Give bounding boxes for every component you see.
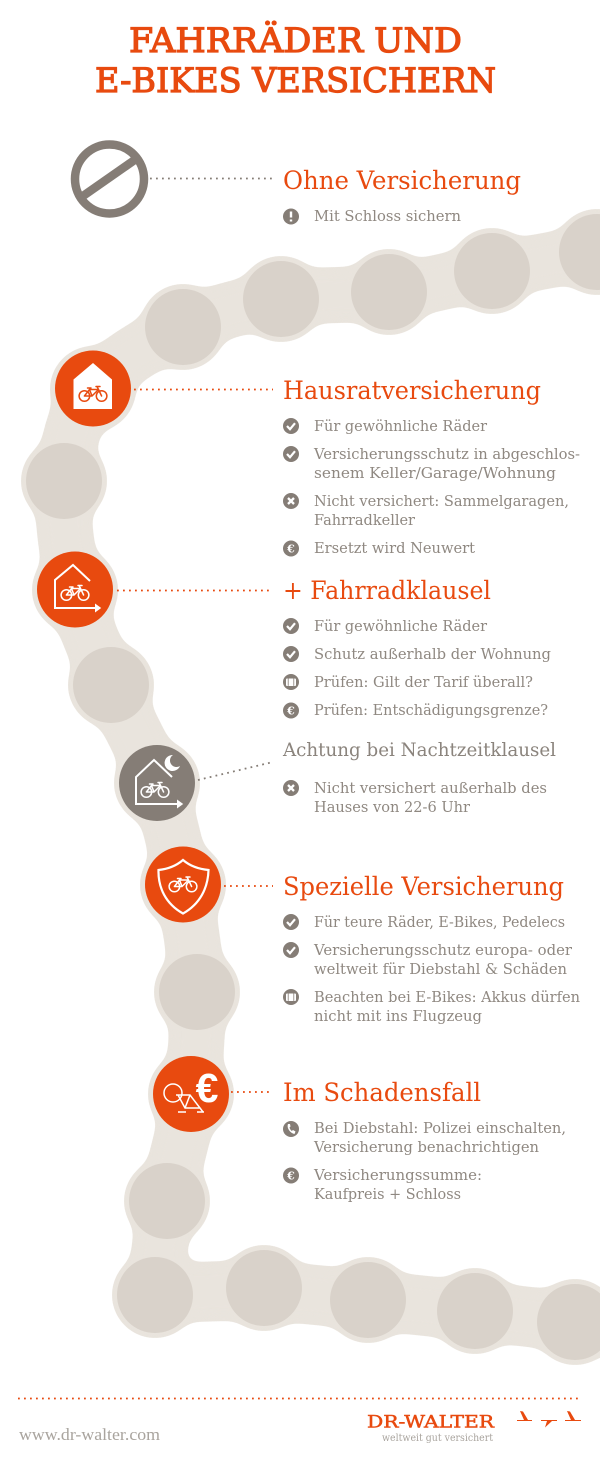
icon: damaged bicycle and euro: € bbox=[196, 1065, 219, 1111]
bullet icon: euro: € bbox=[286, 704, 295, 718]
connector: night clause bbox=[198, 762, 273, 780]
section: im Schadensfall bbox=[283, 1078, 566, 1203]
bullet icon: euro bbox=[283, 540, 299, 556]
bullet icon: euro bbox=[283, 1168, 299, 1184]
section: ohne Versicherung bbox=[283, 166, 521, 225]
bullet text: Kaufpreis + Schloss bbox=[314, 1187, 461, 1203]
bullet text: senem Keller/Garage/Wohnung bbox=[314, 466, 556, 482]
icon: night clause house bbox=[119, 745, 195, 821]
bullet icon: cross bbox=[283, 493, 299, 509]
bullet text bbox=[313, 447, 580, 482]
heading: spezielle Versicherung: Spezielle Versicherung bbox=[283, 872, 564, 901]
bullet text: nicht mit ins Flugzeug bbox=[314, 1009, 482, 1025]
bullet text bbox=[314, 781, 547, 816]
bullet icon: euro: € bbox=[286, 1170, 295, 1182]
bullet text: Versicherungsschutz europa- oder bbox=[313, 943, 572, 959]
logo: DR-WALTER: DR-WALTER bbox=[367, 1412, 495, 1432]
icon: no insurance prohibition sign bbox=[75, 144, 144, 214]
title: E-BIKES VERSICHERN bbox=[95, 61, 496, 101]
bullet icon: exclamation bbox=[283, 208, 299, 224]
bullet icon: cross bbox=[283, 780, 299, 796]
icon: special insurance shield bbox=[145, 846, 221, 922]
section: Fahrradklausel bbox=[283, 576, 551, 719]
bullet icon: euro bbox=[283, 702, 299, 718]
bullet icon: check bbox=[283, 646, 299, 662]
bullet icon: euro: € bbox=[286, 542, 295, 556]
logo: DR-WALTER bbox=[367, 1411, 581, 1444]
bullet icon: suitcase bbox=[283, 989, 299, 1005]
icon: bicycle clause house bbox=[37, 552, 113, 628]
bullet text: Beachten bei E-Bikes: Akkus dürfen bbox=[314, 990, 580, 1006]
bullet text: Mit Schloss sichern bbox=[314, 209, 461, 225]
bullet text: Ersetzt wird Neuwert bbox=[314, 541, 475, 557]
bullet icon: check bbox=[283, 914, 299, 930]
heading: Hausratversicherung: Hausratversicherung bbox=[283, 376, 541, 405]
title bbox=[95, 21, 496, 101]
section: spezielle Versicherung bbox=[283, 872, 580, 1025]
bullet text bbox=[314, 990, 580, 1025]
icon: damaged bicycle and euro bbox=[153, 1056, 229, 1132]
section: Nachtzeitklausel bbox=[282, 739, 556, 816]
bullet text: Nicht versichert außerhalb des bbox=[314, 781, 547, 797]
title: FAHRRÄDER UND bbox=[129, 21, 462, 61]
bullet text: Versicherung benachrichtigen bbox=[313, 1140, 539, 1156]
bullet text: Für gewöhnliche Räder bbox=[314, 619, 487, 635]
bullet text: Nicht versichert: Sammelgaragen, bbox=[314, 494, 569, 510]
bullet text bbox=[314, 494, 569, 529]
connector: household insurance bbox=[134, 388, 273, 390]
bullet icon: check bbox=[283, 418, 299, 434]
connector: claim bbox=[231, 1091, 273, 1093]
heading: Nachtzeitklausel: Achtung bei Nachtzeitklausel bbox=[282, 739, 556, 761]
connector: no insurance bbox=[150, 178, 273, 180]
bullet text: Bei Diebstahl: Polizei einschalten, bbox=[314, 1121, 566, 1137]
bullet text: Versicherungssumme: bbox=[313, 1168, 482, 1184]
bullet text bbox=[313, 943, 572, 978]
connector: special insurance bbox=[224, 885, 273, 887]
icon: household insurance house bbox=[55, 350, 131, 426]
heading: Fahrradklausel: + Fahrradklausel bbox=[283, 576, 491, 605]
bullet icon: check bbox=[283, 942, 299, 958]
logo: DR-WALTER: weltweit gut versichert bbox=[382, 1432, 494, 1444]
bullet icon: phone bbox=[283, 1121, 299, 1137]
bullet text: Für teure Räder, E-Bikes, Pedelecs bbox=[314, 915, 565, 931]
bullet text: Versicherungsschutz in abgeschlos- bbox=[313, 447, 580, 463]
bullet text: Schutz außerhalb der Wohnung bbox=[314, 647, 551, 663]
bicycle chain bbox=[20, 208, 600, 1366]
footer website: www.dr-walter.com bbox=[19, 1425, 160, 1444]
bullet text: weltweit für Diebstahl & Schäden bbox=[314, 962, 567, 978]
heading: ohne Versicherung: Ohne Versicherung bbox=[283, 166, 521, 195]
section: Hausratversicherung bbox=[283, 376, 580, 557]
heading: im Schadensfall: Im Schadensfall bbox=[283, 1078, 481, 1107]
connector: bicycle clause bbox=[117, 590, 273, 592]
bullet icon: suitcase bbox=[283, 674, 299, 690]
bullet text bbox=[313, 1168, 482, 1203]
bullet text bbox=[313, 1121, 566, 1156]
bullet text: Für gewöhnliche Räder bbox=[314, 419, 487, 435]
bullet text: Hauses von 22-6 Uhr bbox=[314, 800, 470, 816]
bullet text: Fahrradkeller bbox=[314, 513, 415, 529]
bullet icon: check bbox=[283, 618, 299, 634]
bullet text: Prüfen: Entschädigungsgrenze? bbox=[314, 703, 548, 719]
bullet text: Prüfen: Gilt der Tarif überall? bbox=[314, 675, 533, 691]
bullet icon: check bbox=[283, 446, 299, 462]
